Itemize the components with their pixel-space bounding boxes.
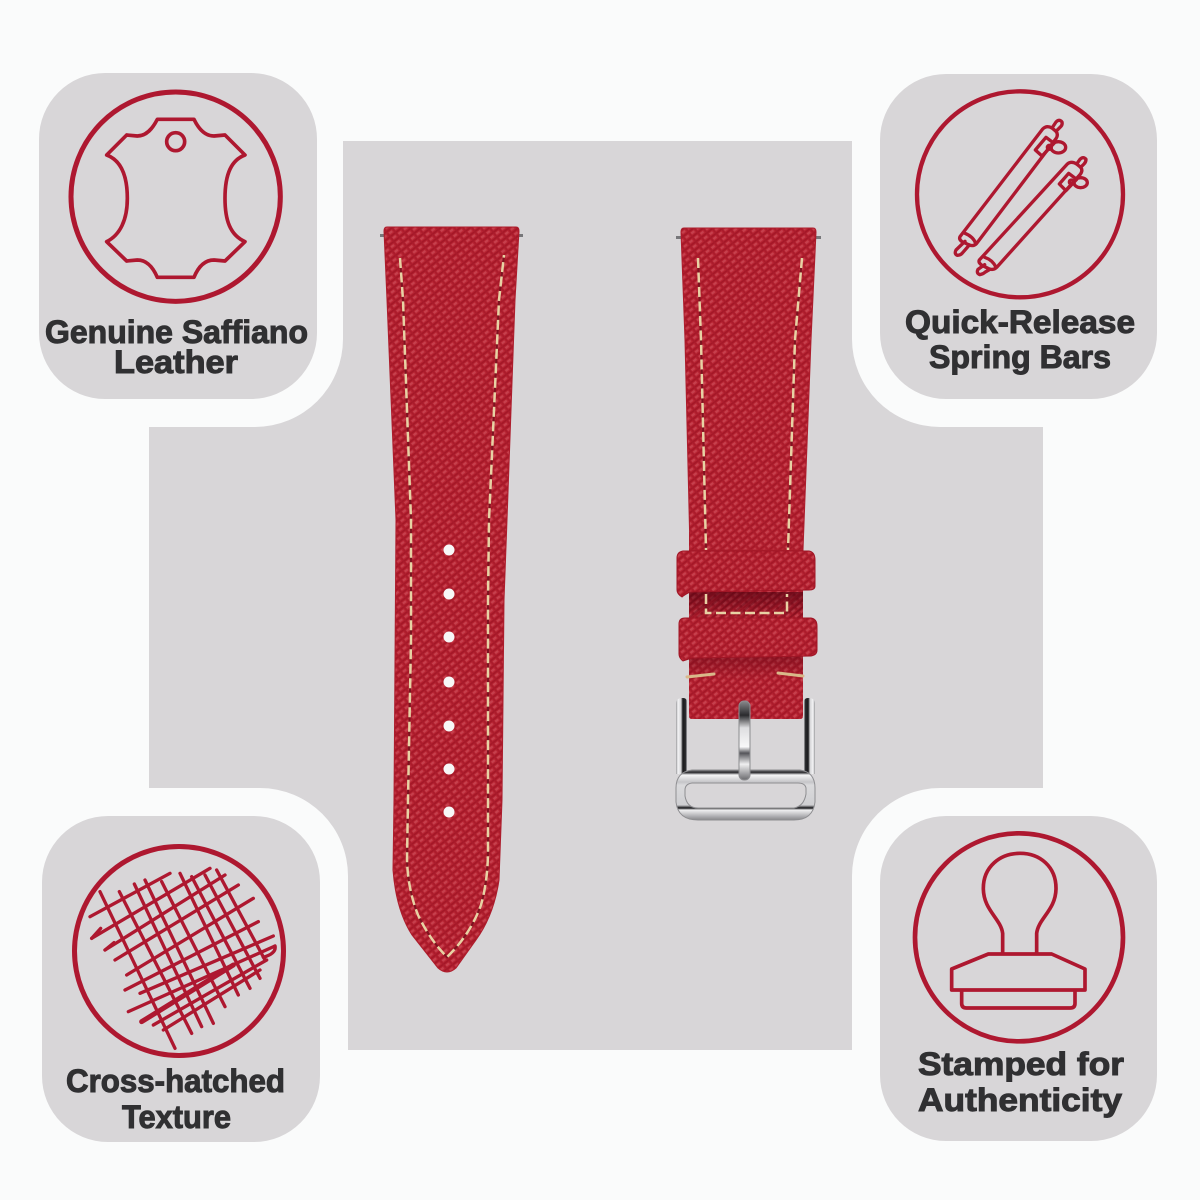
label: quick-release spring bars: Quick-Release [905, 304, 1135, 340]
stitching shadow [400, 255, 504, 957]
shadow under first keeper [689, 592, 803, 618]
panel: cross-hatched texture [42, 816, 320, 1142]
keeper loop two [679, 618, 817, 661]
icon: leather hide in circle [71, 92, 280, 301]
lower strap section [689, 532, 803, 719]
white halo: top right card [852, 0, 1200, 427]
label: cross-hatched texture: Texture [122, 1099, 231, 1135]
stitching [698, 258, 802, 613]
label: genuine saffiano leather: Genuine Saffiano [45, 314, 308, 350]
icon: hand stamp in circle [915, 833, 1123, 1041]
keeper loop one [677, 551, 815, 597]
label: stamped for authenticity: Stamped for [918, 1046, 1124, 1082]
stitching shadow [698, 258, 802, 613]
stitching [400, 255, 504, 957]
label: cross-hatched texture: Cross-hatched [66, 1063, 285, 1099]
strap holes [444, 544, 454, 818]
left margin band [0, 427, 149, 788]
white halo: bottom left card [0, 788, 348, 1200]
long strap with holes [380, 227, 523, 972]
white halo: top left card [0, 0, 343, 427]
icon: cross-hatch in circle [74, 846, 284, 1056]
white halo: bottom right card [852, 788, 1200, 1200]
buckle [676, 698, 815, 820]
panel: stamped for authenticity [880, 816, 1157, 1141]
buckle tongue [739, 701, 750, 780]
texture shade under second keeper [689, 656, 803, 680]
bottom margin band [348, 1050, 852, 1200]
buckle strap with keepers [676, 228, 821, 820]
label: quick-release spring bars: Spring Bars [929, 339, 1111, 375]
upper strap section [681, 228, 816, 550]
icon: spring bars in circle [917, 91, 1123, 297]
label: stamped for authenticity: Authenticity [918, 1082, 1122, 1118]
right margin band [1043, 427, 1200, 788]
panel: quick-release spring bars [880, 74, 1157, 399]
label: genuine saffiano leather: Leather [114, 344, 238, 380]
panel: genuine saffiano leather [39, 73, 317, 399]
grey backdrop panel [149, 141, 1043, 1050]
shaded gap under first keeper [689, 592, 803, 620]
